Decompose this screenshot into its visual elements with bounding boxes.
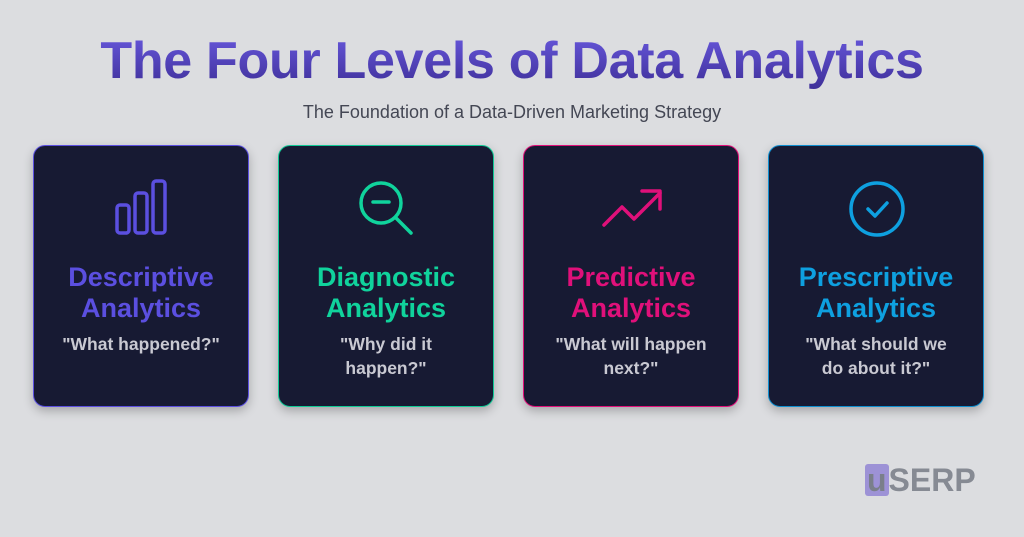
question: "What should we	[805, 334, 947, 354]
heading	[566, 262, 696, 323]
heading	[68, 262, 214, 323]
card: predictive	[523, 145, 739, 407]
heading: Analytics	[326, 293, 446, 323]
icon: bar chart	[115, 179, 167, 235]
heading: Analytics	[816, 293, 936, 323]
logo: u	[867, 462, 887, 498]
title: The Four Levels of Data Analytics	[100, 32, 924, 90]
logo: SERP	[889, 462, 976, 498]
question: "Why did it	[340, 334, 432, 354]
question	[340, 334, 432, 378]
question: "What happened?"	[62, 334, 220, 354]
question: happen?"	[345, 358, 427, 378]
icon: trend arrow	[602, 189, 662, 227]
card: prescriptive	[768, 145, 984, 407]
question	[805, 334, 947, 378]
heading: Analytics	[81, 293, 201, 323]
heading	[799, 262, 953, 323]
card: descriptive	[33, 145, 249, 407]
question: "What will happen	[555, 334, 707, 354]
heading: Prescriptive	[799, 262, 953, 292]
heading: Analytics	[571, 293, 691, 323]
heading: Predictive	[566, 262, 696, 292]
heading: Diagnostic	[317, 262, 455, 292]
question: do about it?"	[822, 358, 930, 378]
icon: magnifier	[359, 181, 413, 235]
card: diagnostic	[278, 145, 494, 407]
icon: check circle	[849, 181, 905, 237]
question	[555, 334, 707, 378]
question: next?"	[604, 358, 658, 378]
heading	[317, 262, 455, 323]
heading: Descriptive	[68, 262, 214, 292]
subtitle: The Foundation of a Data-Driven Marketing Strategy	[303, 102, 721, 122]
